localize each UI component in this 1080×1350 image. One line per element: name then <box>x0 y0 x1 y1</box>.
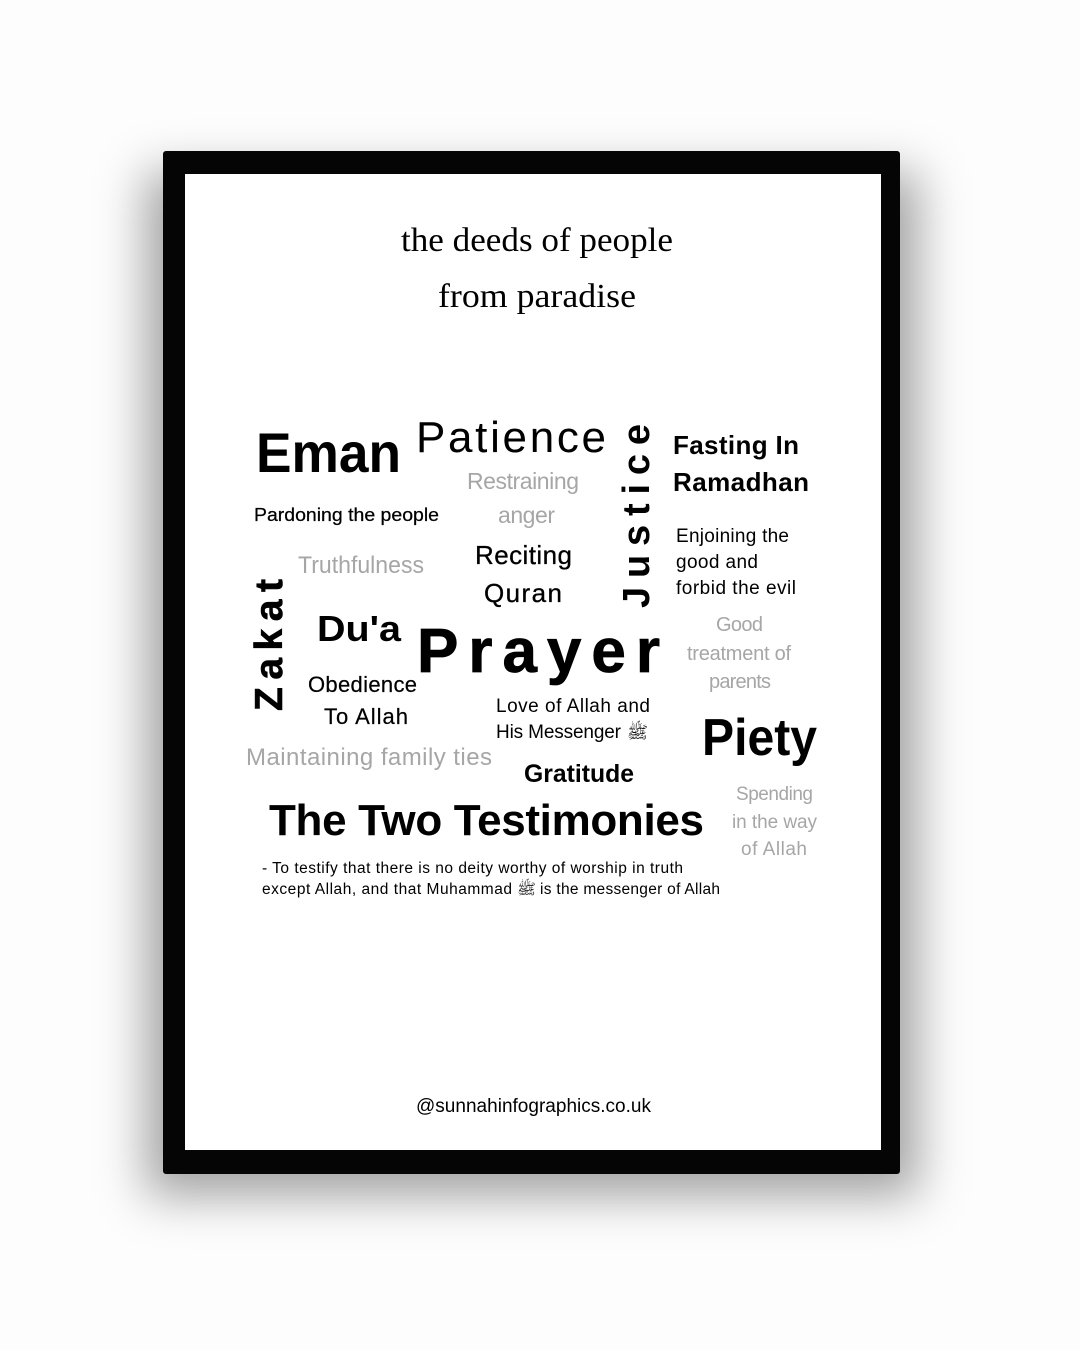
word: Du'a: Du'a <box>317 608 402 649</box>
testimony text: is the messenger of Allah <box>540 881 720 898</box>
word: Justice: Justice <box>616 424 658 608</box>
word: Good treatment of parents <box>687 614 791 693</box>
word: Zakat: Zakat <box>248 579 291 711</box>
word: Maintaining family ties: Maintaining family ties <box>246 744 492 771</box>
frame shadow <box>146 172 918 1196</box>
word cloud <box>246 413 818 898</box>
title: the deeds of people <box>401 222 673 259</box>
title <box>401 222 673 315</box>
word: Pardoning the people: Pardoning the people <box>254 504 439 525</box>
word: Spending in the way of Allah: Spending <box>736 784 813 805</box>
word: Love of Allah <box>496 696 650 743</box>
word: Enjoining the good: forbid the evil <box>676 578 796 599</box>
poster frame <box>163 151 900 1174</box>
word: Restraining anger: Restraining <box>467 468 579 494</box>
testimony text: except Allah, and that Muhammad <box>262 881 512 898</box>
title: from paradise <box>438 278 636 315</box>
testimony text: ﷺ <box>517 878 536 898</box>
word: Spending in the way of Allah <box>732 784 818 860</box>
word: Prayer: Prayer <box>417 617 660 686</box>
word: Piety: Piety <box>702 709 817 767</box>
word: Good treatment of parents: parents <box>709 671 771 693</box>
word: Fasting In Ramadhan: Fasting In <box>673 430 799 460</box>
word: Obedience To Allah: To Allah <box>324 704 408 729</box>
word: Love of Allah: ﷺ <box>627 720 648 742</box>
word: Spending in the way of Allah: of Allah <box>741 839 807 860</box>
word: Fasting In Ramadhan <box>673 430 809 497</box>
word: Reciting Quran: Quran <box>484 578 562 608</box>
word: Enjoining the good: good and <box>676 552 758 573</box>
word: Good treatment of parents: Good <box>716 614 763 636</box>
word: Patience: Patience <box>416 413 606 462</box>
word: Restraining anger <box>467 468 579 528</box>
word: Enjoining the good <box>676 526 796 599</box>
word: Spending in the way of Allah: in the way <box>732 812 818 833</box>
word: Truthfulness: Truthfulness <box>298 552 424 579</box>
word: Fasting In Ramadhan: Ramadhan <box>673 467 809 497</box>
word: Reciting Quran <box>475 540 572 608</box>
word: Love of Allah: His Messenger <box>496 722 622 743</box>
word: Good treatment of parents: treatment of <box>687 643 791 665</box>
word: Love of Allah: Love of Allah and <box>496 696 650 717</box>
word: The Two Testimonies: The Two Testimonies <box>269 796 704 845</box>
testimony text <box>262 860 720 898</box>
word: Restraining anger: anger <box>498 502 555 528</box>
word: Reciting Quran: Reciting <box>475 540 572 570</box>
word: Enjoining the good: Enjoining the <box>676 526 789 547</box>
word: Gratitude: Gratitude <box>524 760 634 788</box>
word: Obedience To Allah: Obedience <box>308 672 417 697</box>
footer handle: @sunnahinfographics.co.uk <box>416 1096 652 1117</box>
word: Obedience To Allah <box>308 672 417 729</box>
word: Eman: Eman <box>256 421 401 484</box>
testimony text: - To testify that there is no deity worthy of worship in truth <box>262 860 683 877</box>
